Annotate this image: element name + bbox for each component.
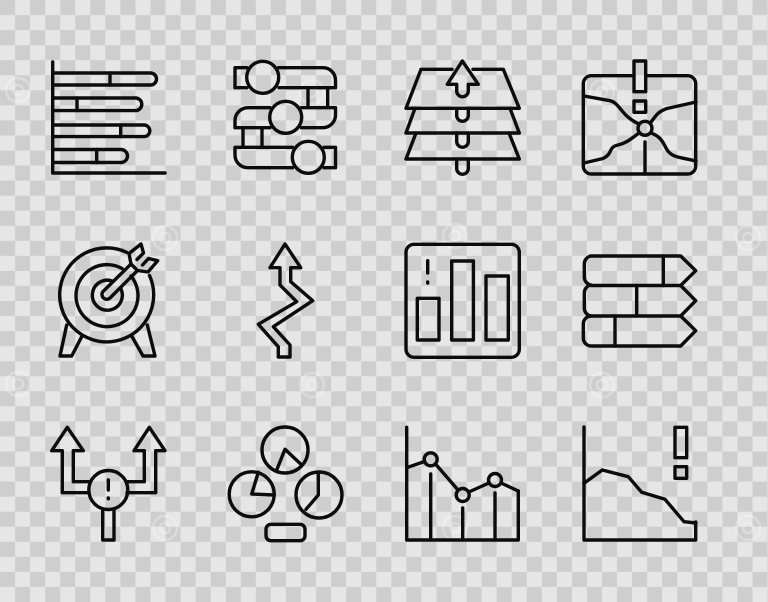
icon: area chart with warning [584, 427, 696, 540]
icon: split arrows with warning [52, 427, 165, 540]
icon: bar chart panel with warning [406, 244, 519, 357]
icon: winding up arrow [258, 244, 313, 357]
icon: layers with up arrow [406, 61, 519, 174]
icon: horizontal bar chart [53, 62, 165, 173]
icon: three pie charts [229, 427, 342, 541]
icon: slider controls [235, 61, 336, 173]
icon: stacked arrow bars [583, 256, 696, 346]
icon: target with arrow [60, 244, 158, 356]
icon: map with warning [583, 61, 696, 174]
icon: line chart with points [407, 427, 518, 540]
